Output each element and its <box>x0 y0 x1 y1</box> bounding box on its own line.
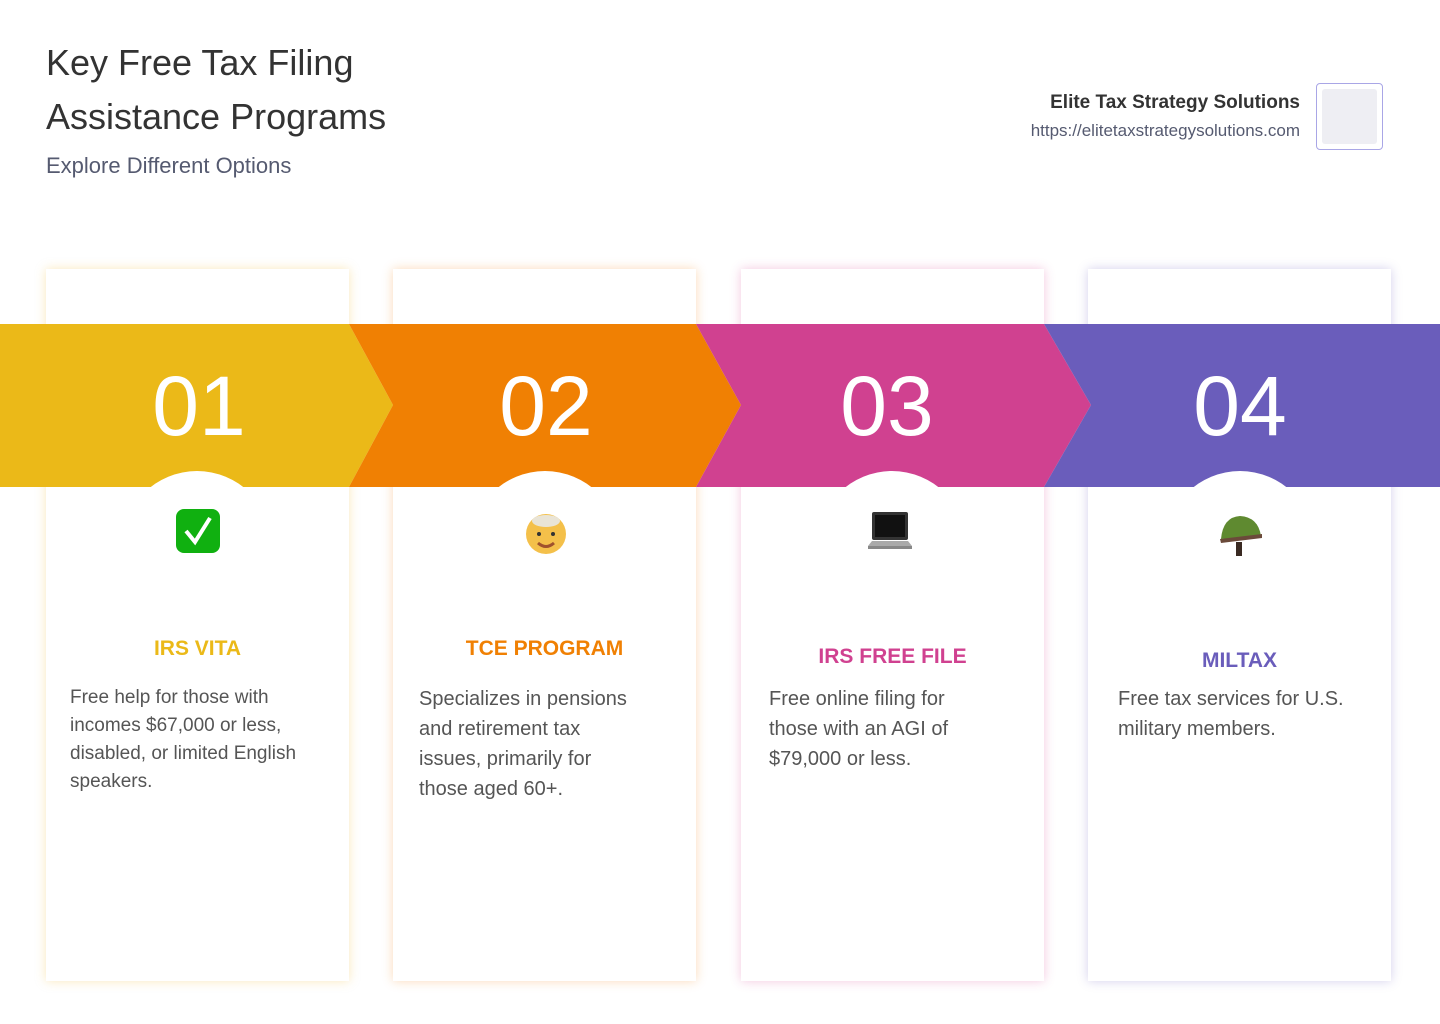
icon: laptop <box>868 512 912 549</box>
brand block <box>1031 92 1300 140</box>
arrow band: 04 <box>1193 359 1287 453</box>
text: IRS VITA <box>154 637 241 660</box>
brand block: https://elitetaxstrategysolutions.com <box>1031 121 1300 140</box>
arrow band: 03 <box>840 359 934 453</box>
text: Free tax services for U.S. military members. <box>1118 688 1344 740</box>
arrow band: 02 <box>499 359 593 453</box>
subtitle: Explore Different Options <box>46 153 291 178</box>
text: Free help for those with incomes $67,000 or less, disabled, or limited English speakers. <box>70 687 296 792</box>
text: IRS FREE FILE <box>818 645 967 668</box>
icon: check <box>176 509 220 553</box>
text: Free online filing for those with an AGI of $79,000 or less. <box>769 688 948 770</box>
card 3 text <box>769 645 967 770</box>
title <box>46 42 386 137</box>
text: TCE PROGRAM <box>466 637 623 660</box>
brand block: Elite Tax Strategy Solutions <box>1050 92 1300 113</box>
card 1 <box>46 269 349 981</box>
card 3 <box>741 269 1044 981</box>
title: Assistance Programs <box>46 96 386 137</box>
icon: older man <box>526 514 566 554</box>
card 1 text <box>70 637 296 792</box>
title: Key Free Tax Filing <box>46 42 353 83</box>
icon: helmet <box>1220 516 1262 556</box>
card 2 <box>393 269 696 981</box>
arrow band: 01 <box>152 359 246 453</box>
card 4 <box>1088 269 1391 981</box>
text: MILTAX <box>1202 649 1277 672</box>
card 2 text <box>419 637 627 800</box>
logo box <box>1316 83 1383 150</box>
card 4 text <box>1118 649 1344 740</box>
text: Specializes in pensions and retirement tax issues, primarily for those aged 60+. <box>419 688 627 800</box>
